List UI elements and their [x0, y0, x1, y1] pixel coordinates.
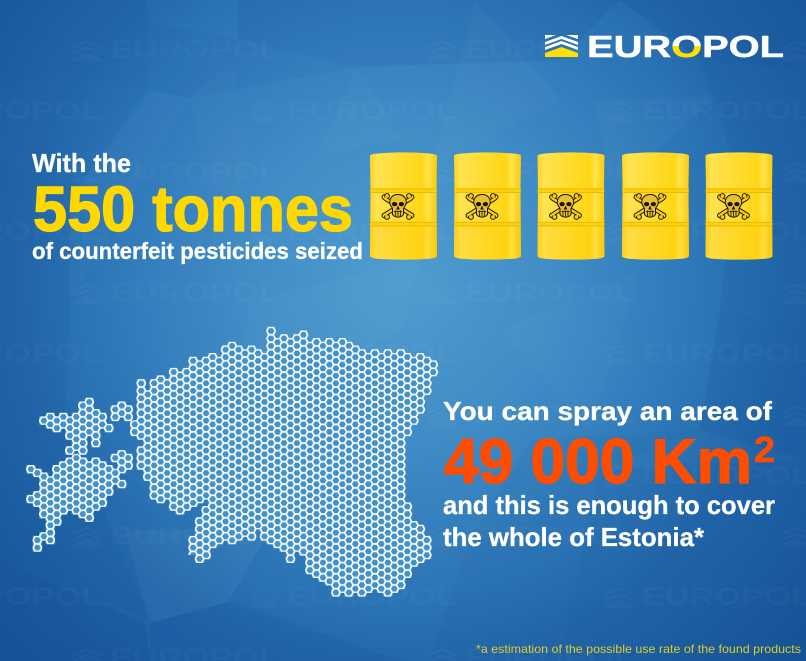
hexagon map of Estonia [20, 320, 440, 610]
icon: barrel 2 [454, 152, 521, 260]
repeated Europol watermark: EUROPOL [110, 279, 280, 307]
logo icon [545, 35, 578, 57]
repeated Europol watermark: EUROPOL [642, 218, 806, 246]
repeated Europol watermark: EUROPOL [642, 97, 806, 125]
icon: barrel 5 [706, 152, 772, 260]
row of toxic barrels [370, 152, 772, 260]
repeated Europol watermark: EUROPOL [287, 340, 457, 368]
icon: barrel 4 [622, 152, 689, 260]
repeated Europol watermark: EUROPOL [465, 401, 635, 429]
repeated Europol watermark: EUROPOL [110, 158, 280, 186]
Europol logo [545, 30, 784, 64]
repeated Europol watermark: EUROPOL [110, 522, 280, 550]
text: the whole of Estonia: the whole of Estonia* [443, 522, 705, 552]
number: 49 000 km2: 2 [754, 429, 775, 470]
repeated Europol watermark: EUROPOL [287, 218, 457, 246]
repeated Europol watermark: EUROPOL [642, 583, 806, 611]
map: mainland and southern islands [20, 320, 440, 610]
repeated Europol watermark: EUROPOL [287, 97, 457, 125]
repeated Europol watermark: EUROPOL [642, 340, 806, 368]
text: with the: With the [32, 148, 131, 178]
headline: 550 tonnes [32, 148, 363, 264]
repeated Europol watermark: EUROPOL [110, 36, 280, 64]
text: enough to cover: and this is enough to cover [443, 490, 775, 520]
map: northern islands [39, 398, 133, 455]
repeated Europol watermark: EUROPOL [642, 462, 806, 490]
repeated Europol watermark: EUROPOL [465, 279, 635, 307]
number: 49 000 km2: 49 000 Km [444, 427, 752, 497]
repeated Europol watermark: EUROPOL [287, 583, 457, 611]
logo wordmark: EUR OPOL [587, 30, 784, 64]
text: of counterfeit pesticides seized: of counterfeit pesticides seized [32, 238, 363, 264]
repeated Europol watermark: EUROPOL [465, 36, 635, 64]
repeated Europol watermark: EUROPOL [465, 158, 635, 186]
text: you can spray: You can spray an area of [443, 396, 772, 426]
icon: barrel 1 [370, 152, 437, 260]
statistic: area sprayed [443, 396, 775, 552]
icon: barrel 3 [538, 152, 604, 260]
number: 550 tonnes: 550 tonnes [33, 173, 353, 245]
footnote: *a estimation of the possible use rate of the found products [476, 642, 801, 656]
repeated Europol watermark: EUROPOL [465, 522, 635, 550]
